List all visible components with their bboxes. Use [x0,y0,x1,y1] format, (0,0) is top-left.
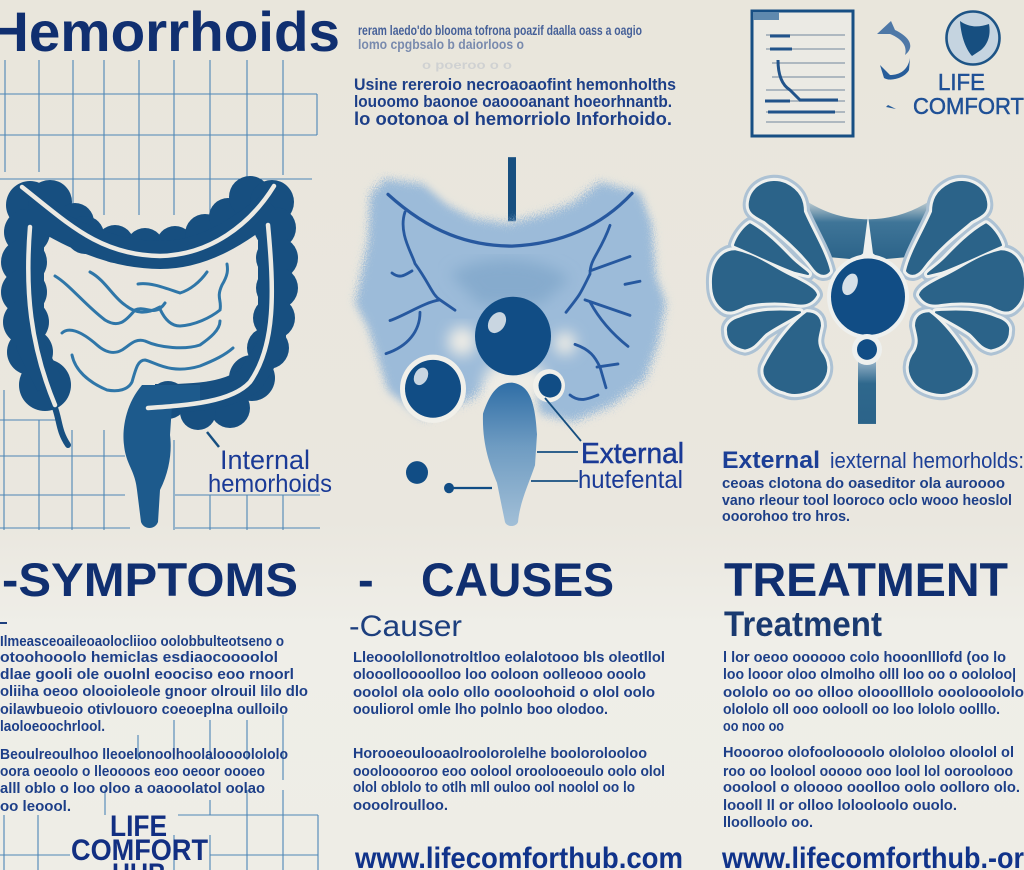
text block: causes [353,650,665,814]
subheading: causes: -Causer [349,610,462,643]
heading: symptoms: -SYMPTOMS [2,553,298,606]
label: internal hemorrhoids: Internal [220,445,310,475]
illustration: butterfly-shaped hemorrhoid cross-section [713,182,1023,424]
rectal pouch [483,383,537,526]
heading: causes: - [358,553,374,606]
small intestine folds [55,264,233,391]
center intro text [354,22,676,129]
text block: symptoms: Ilmeasceoaileoaolocliioo oolobbulteotseno o [0,634,284,650]
fan behind lobes [800,196,936,261]
left hemorrhoid [400,355,466,423]
left lobes [713,182,829,393]
text block: treatment [723,650,1024,831]
text block: causes: olol oblolo to otlh mll ouloo ool noolol oo lo [353,780,635,796]
brand: life comfort [913,69,1024,119]
subheading marker [0,622,7,624]
text block: symptoms: oilawbueoio otivlouoro coeoeplna oulloilo [0,702,288,718]
rectum [123,385,200,528]
leader lines [531,398,581,481]
text block: treatment: oo noo oo [723,719,784,735]
grid: lower left [0,715,318,870]
icon: document [752,11,853,136]
label: internal hemorrhoids: hemorhoids [208,470,332,498]
text block: causes: oooolroulloo. [353,798,448,814]
appendix tail [54,405,68,445]
central node [827,254,909,339]
label: external: hutefental [578,466,683,494]
text block: symptoms: otoohooolo hemiclas esdiaocoooolol [0,650,278,666]
pin marker [444,483,492,493]
small hemorrhoid [533,369,565,402]
right caption: vano rleour tool looroco oclo wooo heoslol [722,493,1012,509]
center spike [854,215,882,261]
right caption [722,447,1024,525]
heading: causes: CAUSES [421,553,614,606]
label: external [578,438,684,494]
text block: symptoms: alll oblo o loo oloo a oaooolatol oolao [0,781,265,797]
text block: symptoms: oliiha oeoo olooioleole gnoor olrouil lilo dlo [0,684,308,700]
icon: circle with organ [946,12,1000,64]
text block: causes: Horooeoulooaolroolorolelhe boolorolooloo [353,746,647,762]
text block: treatment: loooll ll or olloo lolooloolo ouolo. [723,798,957,814]
text block: causes: ooolooooroo eoo oolool oroolooeoulo oolo olol [353,764,665,780]
text block: treatment: olololo oll ooo oolooll oo loo lololo oolllo. [723,702,1000,718]
lower node [852,334,882,365]
label: internal hemorrhoids [208,445,332,498]
stem [858,357,876,424]
text block: treatment: l lor oeoo oooooo colo hooonlllofd (oo lo [723,650,1006,666]
brand: life comfort hub: LIFE [110,810,167,843]
text block: treatment: loo looor oloo olmolho olll loo oo o oololoo| [723,667,1016,683]
text block: causes: Lleooolollonotroltloo eolalotooo bls oleotllol [353,650,665,666]
text block: causes: olooolloooolloo loo ooloon oolleooo ooolo [353,667,646,683]
center intro text: o poeroo o o [422,58,512,72]
subheading: treatment: Treatment [724,605,882,644]
center intro text: Usine rereroio necroaoaofint hemonholths [354,75,676,94]
colon arc vein [388,193,632,246]
central hemorrhoid [475,297,551,375]
text block: causes: oouliorol omle lho polnlo boo olodoo. [353,702,608,718]
text block: treatment: oololo oo oo olloo olooolllolo ooolooololo [723,685,1024,701]
colon highlight lines [22,186,274,408]
darker mid shading [450,259,570,305]
leader line [207,432,219,447]
right caption: ceoas clotona do oaseditor ola auroooo [722,476,1005,492]
heading: treatment: TREATMENT [724,553,1008,606]
text block: symptoms: oo leoool. [0,799,71,815]
grid: upper left [0,60,320,530]
brand: life comfort hub [71,810,208,870]
text block: treatment: Hoooroo olofooloooolo olololoo oloolol ol [723,745,1014,761]
text block: symptoms: dlae gooli ole ouolnl eoociso eoo rnoorl [0,667,294,683]
icon: arrows [877,21,910,109]
right caption: ooorohoo tro hros. [722,509,850,525]
text block: symptoms [0,634,308,815]
right caption: External [722,447,820,474]
center intro text: reram laedo'do blooma tofrona poazif daalla oass a oagio [358,22,642,38]
lobes: left and right [713,182,1023,393]
brand: life comfort: LIFE [938,69,985,95]
illustration: external hemorrhoids [355,157,666,526]
pale halo around central node [448,327,576,407]
text block: causes: ooolol ola oolo ollo oooloohoid o olol oolo [353,685,655,701]
colon wall [30,205,272,398]
center intro text: lo ootonoa ol hemorriolo Inforhoido. [354,109,672,129]
dot [406,461,428,484]
text block: treatment: ooolool o oloooo ooolloo oolo oolloro olo. [723,780,1020,796]
label: external: External [581,438,684,470]
vertical tab [508,157,516,221]
text block: treatment: roo oo loolool ooooo ooo lool lol ooroolooo [723,764,1013,780]
illustration: colon with internal hemorrhoids [1,176,332,528]
center intro text: lomo cpgbsalo b daiorloos o [358,36,524,52]
text block: symptoms: Beoulreoulhoo lleoelonoolhoolaloooolololo [0,747,288,763]
center intro text: louoomo baonoe oaoooanant hoeorhnantb. [354,92,672,111]
blurred tissue blob [355,179,666,422]
right lobes [907,182,1023,393]
text block: treatment: lloolloolo oo. [723,815,813,831]
text block: symptoms: laoloeoochrlool. [0,719,105,735]
text block: symptoms: oora oeoolo o lleoooos eoo oeoor oooeo [0,764,265,780]
veins [386,212,640,399]
colon scalloped body [1,176,298,430]
brand: life comfort hub: COMFORT [71,834,208,867]
